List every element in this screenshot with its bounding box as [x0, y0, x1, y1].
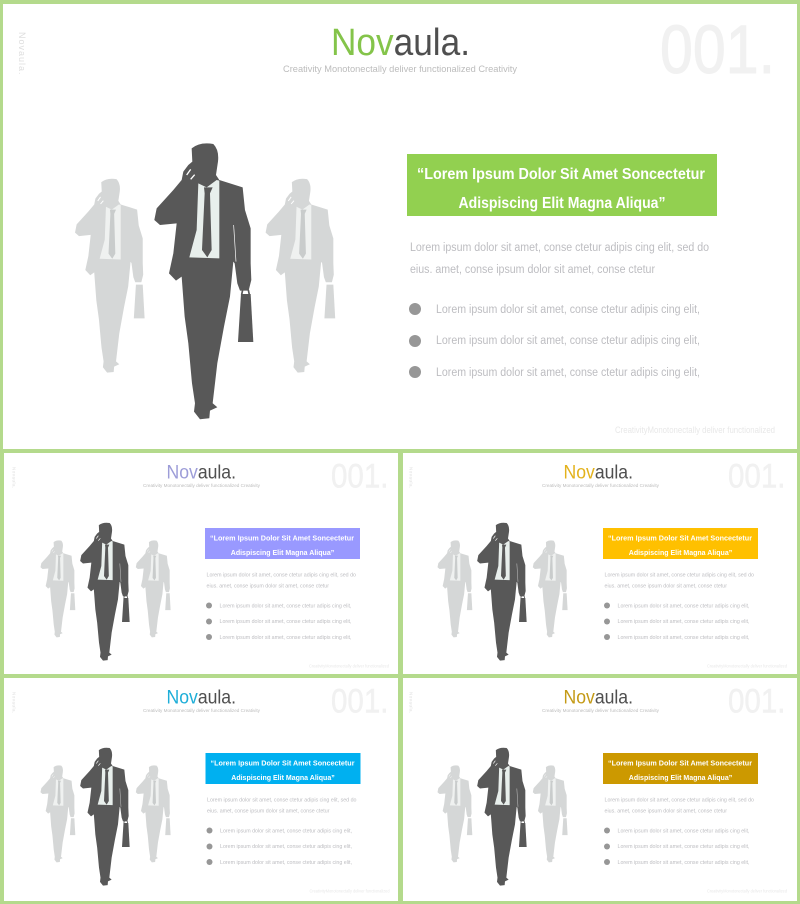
panel: purple slide: 001. [331, 458, 388, 496]
panel: dark yellow slide: CreativityMonotonectally deliver functionalized [707, 888, 787, 894]
bullet list: Lorem ipsum dolor sit amet, conse ctetur adipis cing elit, [436, 335, 700, 347]
panel: dark yellow slide: Lorem ipsum dolor sit amet, conse ctetur adipis cing elit, [618, 860, 750, 866]
right silhouette [266, 179, 335, 373]
panel: purple slide [4, 453, 398, 674]
title: yellow: Novaula. [564, 462, 633, 484]
panel: blue slide: 001. [331, 682, 388, 720]
panel: blue slide: CreativityMonotonectally deliver functionalized [310, 888, 390, 894]
panel: blue slide: Lorem ipsum dolor sit amet, conse ctetur adipis cing elit, [220, 828, 352, 834]
panel: dark yellow slide: “Lorem Ipsum Dolor Sit Amet Soncectetur [608, 758, 752, 768]
panel: yellow slide: CreativityMonotonectally deliver functionalized [707, 664, 787, 668]
title: blue: Novaula. [166, 688, 236, 708]
panel: blue slide: Novaula. [12, 692, 16, 714]
panel: purple slide: Lorem ipsum dolor sit amet, conse ctetur adipis cing elit, sed do [206, 572, 356, 578]
panel: purple slide: Adispiscing Elit Magna Aliqua” [231, 548, 334, 557]
panel: blue slide: Creativity Monotonectally deliver functionalized Creativity [143, 708, 261, 714]
panel: dark yellow slide: Creativity Monotonectally deliver functionalized Creativity [542, 708, 660, 714]
panel: yellow slide: Creativity Monotonectally deliver functionalized Creativity [542, 483, 660, 489]
panel: yellow slide: Novaula. [408, 467, 414, 489]
panel: purple slide: Lorem ipsum dolor sit amet, conse ctetur adipis cing elit, [220, 619, 352, 625]
quote text: “Lorem Ipsum Dolor Sit Amet Soncectetur [417, 166, 705, 183]
panel: dark yellow slide [403, 678, 797, 901]
panel: dark yellow slide: 001. [728, 682, 786, 720]
panel: purple slide: CreativityMonotonectally deliver functionalized [309, 664, 389, 668]
panel: large green slide [3, 4, 797, 449]
panel: blue slide: Lorem ipsum dolor sit amet, conse ctetur adipis cing elit, [220, 860, 352, 866]
title: purple: Novaula. [166, 462, 236, 484]
panel: blue slide: eius. amet, conse ipsum dolor sit amet, conse ctetur [207, 808, 330, 814]
panel: purple slide: Lorem ipsum dolor sit amet, conse ctetur adipis cing elit, [220, 635, 352, 641]
quote text: Adispiscing Elit Magna Aliqua” [458, 195, 666, 212]
panel: yellow slide: “Lorem Ipsum Dolor Sit Amet Soncectetur [608, 534, 752, 542]
subtitle: Creativity Monotonectally deliver functionalized Creativity [283, 64, 517, 75]
page number: 001. [660, 11, 775, 88]
panel: blue slide: Lorem ipsum dolor sit amet, conse ctetur adipis cing elit, sed do [207, 798, 356, 804]
panel: purple slide: Novaula. [12, 467, 16, 489]
panel: dark yellow slide: Adispiscing Elit Magna Aliqua” [629, 773, 732, 782]
panel: dark yellow slide: Lorem ipsum dolor sit amet, conse ctetur adipis cing elit, [618, 844, 750, 850]
centre silhouette [154, 143, 253, 419]
panel: yellow slide: eius. amet, conse ipsum dolor sit amet, conse ctetur [604, 584, 727, 590]
panel: purple slide: Creativity Monotonectally deliver functionalized Creativity [143, 483, 261, 489]
panel: dark yellow slide: eius. amet, conse ipsum dolor sit amet, conse ctetur [604, 808, 727, 814]
panel: dark yellow slide: Lorem ipsum dolor sit amet, conse ctetur adipis cing elit, sed do [604, 798, 754, 804]
panel: dark yellow slide: Lorem ipsum dolor sit amet, conse ctetur adipis cing elit, [618, 828, 750, 834]
panel: blue slide: Lorem ipsum dolor sit amet, conse ctetur adipis cing elit, [220, 844, 352, 850]
panel: blue slide [4, 678, 398, 901]
quote box: blue [206, 753, 360, 784]
panel: yellow slide: Adispiscing Elit Magna Aliqua” [629, 548, 732, 557]
panel: blue slide: Adispiscing Elit Magna Aliqua” [231, 773, 335, 782]
body text: eius. amet, conse ipsum dolor sit amet, conse ctetur [410, 264, 655, 276]
panel: yellow slide: Lorem ipsum dolor sit amet, conse ctetur adipis cing elit, [618, 604, 750, 610]
panel: blue slide: “Lorem Ipsum Dolor Sit Amet Soncectetur [210, 758, 354, 768]
panel: purple slide: Lorem ipsum dolor sit amet, conse ctetur adipis cing elit, [220, 604, 352, 610]
panel: yellow slide: Lorem ipsum dolor sit amet, conse ctetur adipis cing elit, [618, 619, 750, 625]
panel: yellow slide: 001. [728, 458, 786, 496]
panel: yellow slide: Lorem ipsum dolor sit amet, conse ctetur adipis cing elit, sed do [604, 572, 754, 578]
panel: yellow slide: Lorem ipsum dolor sit amet, conse ctetur adipis cing elit, [618, 635, 750, 641]
title: Novaula. [331, 22, 470, 64]
title: dark yellow: Novaula. [564, 688, 633, 708]
quote box: dark yellow [603, 753, 758, 784]
bullet list [409, 303, 700, 379]
footer text: CreativityMonotonectally deliver functionalized [615, 425, 775, 435]
bullet list: Lorem ipsum dolor sit amet, conse ctetur adipis cing elit, [436, 304, 700, 316]
panel: purple slide: “Lorem Ipsum Dolor Sit Amet Soncectetur [210, 534, 354, 542]
quote box: yellow [603, 528, 758, 559]
side label: Novaula. [17, 32, 27, 76]
left silhouette [75, 179, 145, 373]
panel: dark yellow slide: Novaula. [408, 692, 414, 714]
body text: Lorem ipsum dolor sit amet, conse ctetur adipis cing elit, sed do [410, 242, 709, 254]
bullet list: Lorem ipsum dolor sit amet, conse ctetur adipis cing elit, [436, 367, 700, 379]
quote box: purple [205, 528, 360, 559]
quote box [407, 154, 717, 216]
panel: yellow slide [403, 453, 797, 674]
panel: purple slide: eius. amet, conse ipsum dolor sit amet, conse ctetur [206, 584, 329, 590]
